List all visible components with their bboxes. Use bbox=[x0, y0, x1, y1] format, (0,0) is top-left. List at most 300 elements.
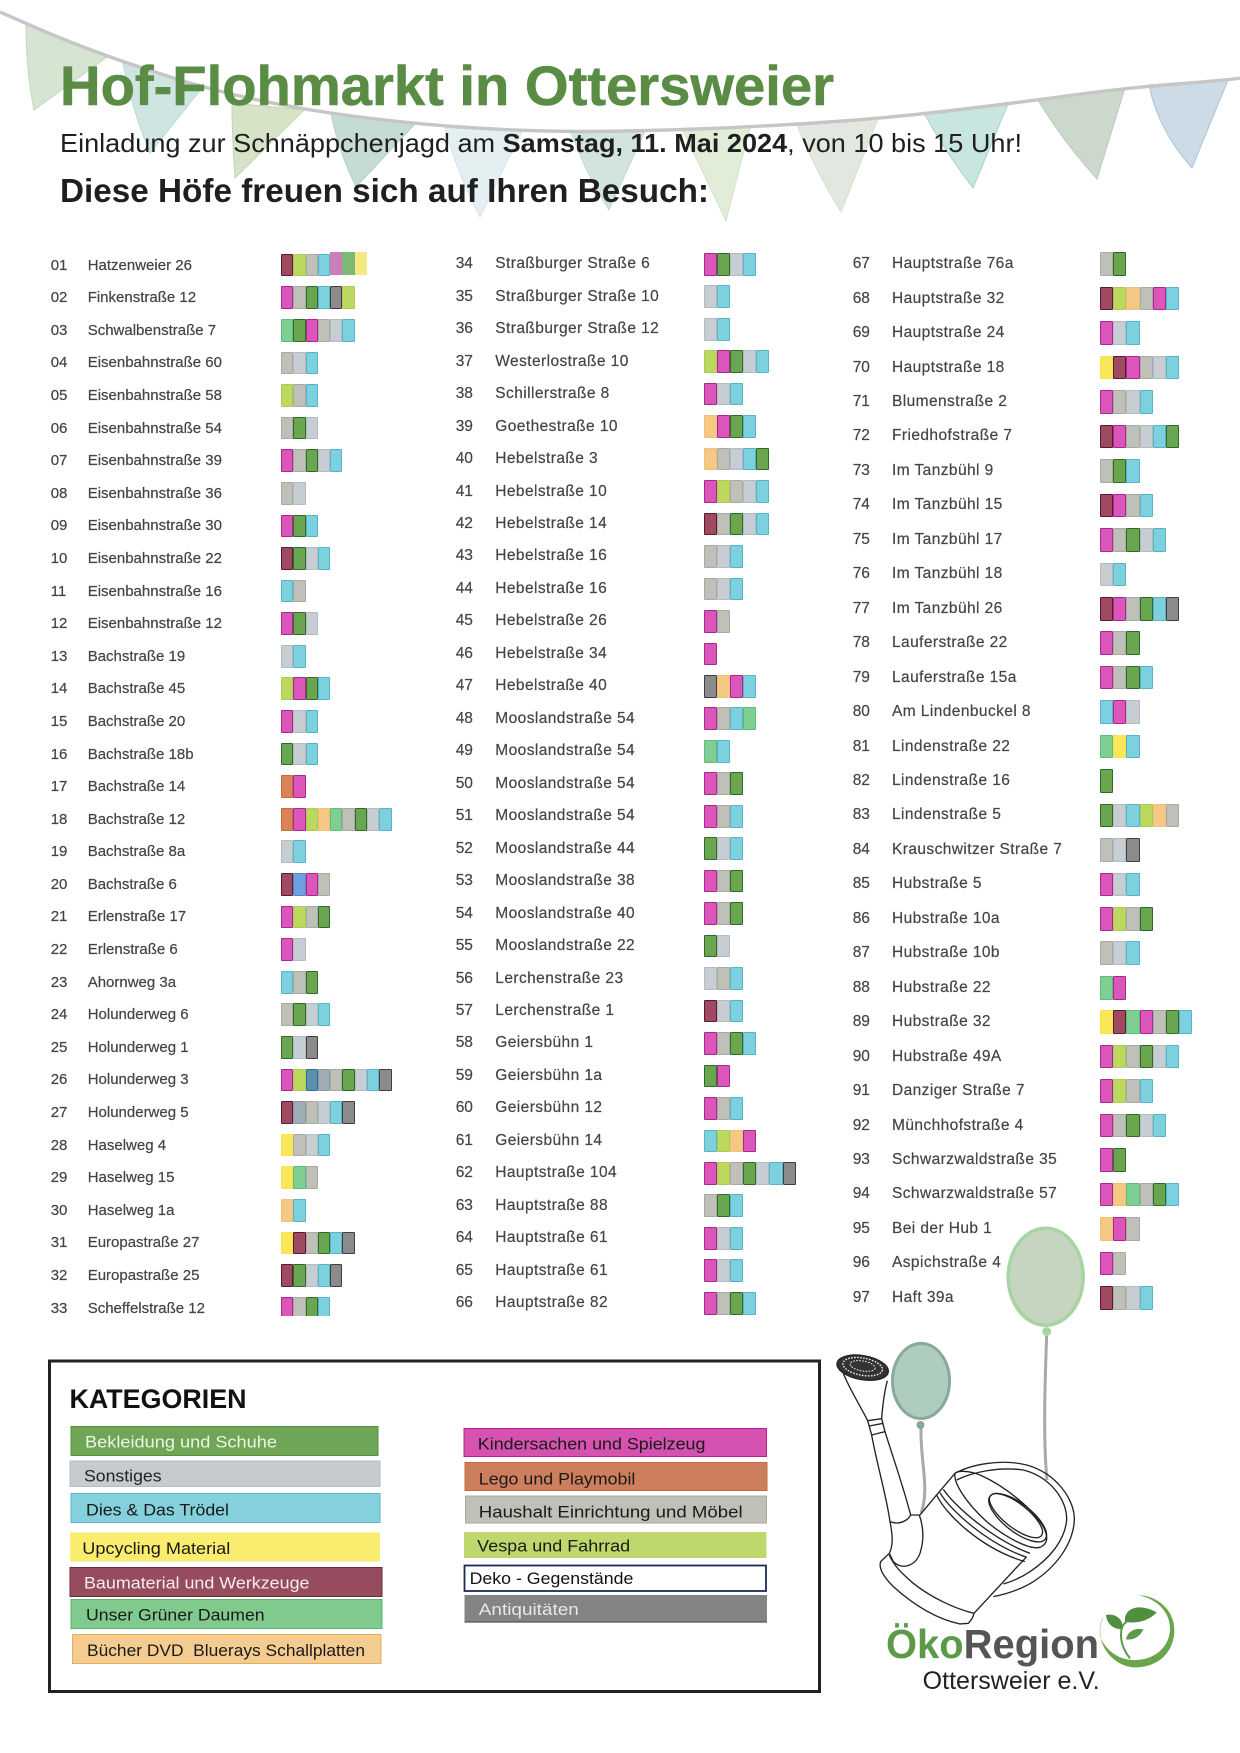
row 32 bbox=[51, 1264, 342, 1287]
row 03: 03 bbox=[51, 322, 67, 339]
bunting string bbox=[0, 12, 1240, 132]
category: decoration: Deko - Gegenstände bbox=[470, 1569, 633, 1588]
category: bric-a-brac: Dies & Das Trödel bbox=[86, 1501, 229, 1520]
logo subtitle: Ottersweier e.V. bbox=[923, 1668, 1100, 1695]
row 95: 95 bbox=[853, 1220, 870, 1237]
row 89 bbox=[853, 1005, 1192, 1039]
row 75: Im Tanzbühl 17 bbox=[892, 531, 1003, 548]
row 91: 91 bbox=[853, 1082, 870, 1099]
row 41 bbox=[456, 475, 796, 508]
row 15: 15 bbox=[51, 713, 67, 730]
row 70 bbox=[853, 350, 1192, 385]
category: books and media: Bücher DVD Bluerays Schallplatten bbox=[87, 1641, 365, 1660]
row 26 bbox=[51, 1069, 392, 1091]
row 78 bbox=[853, 626, 1192, 660]
row 06: 06 bbox=[51, 420, 67, 437]
row 88: Hubstraße 22 bbox=[892, 979, 991, 996]
row 83: Lindenstraße 5 bbox=[892, 806, 1001, 823]
panel: categories legend bbox=[50, 1361, 820, 1692]
category: antiques bbox=[464, 1595, 767, 1623]
row 41: Hebelstraße 10 bbox=[495, 483, 607, 500]
row 29: Haselweg 15 bbox=[88, 1169, 174, 1186]
row 45: Hebelstraße 26 bbox=[495, 612, 607, 629]
row 87 bbox=[853, 936, 1192, 971]
row 73: 73 bbox=[853, 462, 870, 479]
row 24: Holunderweg 6 bbox=[88, 1006, 189, 1023]
row 22: Erlenstraße 6 bbox=[88, 941, 178, 958]
row 11: Eisenbahnstraße 16 bbox=[88, 583, 222, 600]
row 22: 22 bbox=[51, 941, 67, 958]
row 69: 69 bbox=[853, 324, 870, 341]
category: vespa and bikes bbox=[464, 1532, 766, 1558]
row 33: Scheffelstraße 12 bbox=[88, 1300, 205, 1317]
category: green thumb: Unser Grüner Daumen bbox=[86, 1606, 265, 1625]
row 95 bbox=[853, 1212, 1192, 1246]
row 07: 07 bbox=[51, 452, 67, 469]
row 45 bbox=[456, 605, 796, 638]
row 60 bbox=[456, 1092, 796, 1125]
row 02 bbox=[51, 286, 355, 309]
row 36: Straßburger Straße 12 bbox=[495, 320, 659, 337]
category: building materials: Baumaterial und Werkzeuge bbox=[84, 1574, 310, 1593]
row 23: Ahornweg 3a bbox=[88, 974, 176, 991]
row 32: 32 bbox=[51, 1267, 67, 1284]
row 08: 08 bbox=[51, 485, 67, 502]
legend heading: KATEGORIEN bbox=[70, 1384, 246, 1414]
row 84: 84 bbox=[853, 841, 870, 858]
row 17 bbox=[51, 775, 306, 798]
row 01: 01 bbox=[51, 257, 67, 274]
row 51: Mooslandstraße 54 bbox=[495, 807, 635, 824]
category: children bbox=[464, 1428, 766, 1456]
row 59: Geiersbühn 1a bbox=[495, 1067, 602, 1084]
row 06 bbox=[51, 417, 318, 439]
row 68 bbox=[853, 281, 1192, 316]
row 23 bbox=[51, 971, 318, 994]
row 87: 87 bbox=[853, 944, 870, 961]
logo: ÖkoRegion Ottersweier bbox=[886, 1595, 1174, 1695]
row 20 bbox=[51, 873, 330, 896]
row 64: 64 bbox=[456, 1229, 473, 1246]
row 21: Erlenstraße 17 bbox=[88, 908, 186, 925]
row 29 bbox=[51, 1166, 318, 1189]
row 92: Münchhofstraße 4 bbox=[892, 1117, 1024, 1134]
row 55: 55 bbox=[456, 937, 473, 954]
row 11 bbox=[51, 580, 306, 602]
row 77: Im Tanzbühl 26 bbox=[892, 600, 1003, 617]
row 05: Eisenbahnstraße 58 bbox=[88, 387, 222, 404]
row 55 bbox=[456, 930, 796, 962]
row 14: Bachstraße 45 bbox=[88, 680, 185, 697]
logo wordmark: ÖkoRegion bbox=[886, 1621, 1099, 1667]
row 69 bbox=[853, 316, 1192, 350]
row 62: Hauptstraße 104 bbox=[495, 1164, 617, 1181]
row 44: 44 bbox=[456, 580, 473, 597]
icon: large balloon bbox=[1008, 1228, 1083, 1480]
row 68: 68 bbox=[853, 290, 870, 307]
row 21 bbox=[51, 906, 330, 928]
row 47 bbox=[456, 670, 796, 703]
row 90: Hubstraße 49A bbox=[892, 1048, 1002, 1065]
panel: address list column 3 bbox=[853, 247, 1192, 1315]
row 25: Holunderweg 1 bbox=[88, 1039, 189, 1056]
row 90: 90 bbox=[853, 1048, 870, 1065]
row 94: 94 bbox=[853, 1185, 870, 1202]
row 23: 23 bbox=[51, 974, 67, 991]
row 17: 17 bbox=[51, 778, 67, 795]
row 02: Finkenstraße 12 bbox=[88, 289, 196, 306]
row 85: Hubstraße 5 bbox=[892, 875, 982, 892]
row 03 bbox=[51, 319, 355, 342]
row 64 bbox=[456, 1222, 796, 1255]
row 24 bbox=[51, 1003, 330, 1026]
row 04: Eisenbahnstraße 60 bbox=[88, 354, 222, 371]
row 82: 82 bbox=[853, 772, 870, 789]
row 14 bbox=[51, 677, 330, 700]
row 66 bbox=[456, 1287, 796, 1319]
row 19: Bachstraße 8a bbox=[88, 843, 185, 860]
row 20: 20 bbox=[51, 876, 67, 893]
row 82: Lindenstraße 16 bbox=[892, 772, 1010, 789]
row 39: Goethestraße 10 bbox=[495, 418, 618, 435]
legend frame bbox=[50, 1361, 820, 1692]
row 52: Mooslandstraße 44 bbox=[495, 840, 635, 857]
row 16: 16 bbox=[51, 746, 67, 762]
row 50: Mooslandstraße 54 bbox=[495, 775, 635, 792]
row 65: 65 bbox=[456, 1262, 473, 1279]
row 24: 24 bbox=[51, 1006, 67, 1023]
row 82 bbox=[853, 764, 1192, 798]
row 87: Hubstraße 10b bbox=[892, 944, 1000, 961]
category: household: Haushalt Einrichtung und Möbel bbox=[479, 1502, 743, 1521]
row 27: 27 bbox=[51, 1104, 67, 1121]
row 76: Im Tanzbühl 18 bbox=[892, 565, 1003, 582]
row 93: 93 bbox=[853, 1151, 870, 1168]
row 61: Geiersbühn 14 bbox=[495, 1132, 602, 1149]
category: bric-a-brac bbox=[71, 1494, 380, 1522]
row 20: Bachstraße 6 bbox=[88, 876, 177, 893]
row 28: Haselweg 4 bbox=[88, 1137, 166, 1154]
row 71: 71 bbox=[853, 393, 870, 410]
row 37: 37 bbox=[456, 353, 473, 370]
row 74: 74 bbox=[853, 496, 870, 513]
category: children: Kindersachen und Spielzeug bbox=[478, 1434, 705, 1453]
row 62 bbox=[456, 1157, 796, 1190]
row 92: 92 bbox=[853, 1117, 870, 1134]
row 27 bbox=[51, 1101, 355, 1124]
row 07 bbox=[51, 449, 342, 472]
row 40: 40 bbox=[456, 450, 473, 467]
row 58: 58 bbox=[456, 1034, 473, 1051]
row 70: 70 bbox=[853, 359, 870, 376]
icon: watering can bbox=[835, 1351, 1074, 1624]
row 54 bbox=[456, 897, 796, 930]
row 50 bbox=[456, 768, 796, 800]
row 11: 11 bbox=[51, 583, 66, 600]
panel: address list column 2 bbox=[456, 253, 796, 1315]
row 40 bbox=[456, 443, 796, 475]
row 18: 18 bbox=[51, 811, 67, 828]
row 92 bbox=[853, 1108, 1192, 1143]
row 38: Schillerstraße 8 bbox=[495, 385, 610, 402]
category: vespa and bikes: Vespa und Fahrrad bbox=[477, 1537, 630, 1556]
row 61 bbox=[456, 1125, 796, 1157]
row 49: 49 bbox=[456, 742, 473, 759]
row 01: Hatzenweier 26 bbox=[88, 257, 192, 274]
row 25: 25 bbox=[51, 1039, 67, 1056]
row 51 bbox=[456, 800, 796, 832]
row 03: Schwalbenstraße 7 bbox=[88, 322, 216, 339]
row 69: Hauptstraße 24 bbox=[892, 324, 1005, 341]
row 06: Eisenbahnstraße 54 bbox=[88, 420, 222, 437]
row 49 bbox=[456, 735, 796, 768]
title: Hof-Flohmarkt in Ottersweier bbox=[60, 54, 834, 117]
row 26: 26 bbox=[51, 1071, 67, 1088]
row 75 bbox=[853, 523, 1192, 557]
row 95: Bei der Hub 1 bbox=[892, 1220, 992, 1237]
row 79: Lauferstraße 15a bbox=[892, 669, 1017, 686]
row 71 bbox=[853, 385, 1192, 419]
row 09: Eisenbahnstraße 30 bbox=[88, 517, 222, 534]
row 67: Hauptstraße 76a bbox=[892, 255, 1014, 272]
row 66: 66 bbox=[456, 1294, 473, 1311]
row 58: Geiersbühn 1 bbox=[495, 1034, 593, 1051]
row 15: Bachstraße 20 bbox=[88, 713, 185, 730]
row 46: 46 bbox=[456, 645, 473, 662]
row 88 bbox=[853, 971, 1192, 1005]
row 05: 05 bbox=[51, 387, 67, 404]
category: lego: Lego und Playmobil bbox=[479, 1469, 635, 1488]
row 93 bbox=[853, 1143, 1192, 1177]
icon: sprout in circle bbox=[1100, 1595, 1174, 1667]
panel: address list column 1 bbox=[51, 252, 392, 1317]
row 54: 54 bbox=[456, 905, 473, 922]
row 43 bbox=[456, 540, 796, 573]
row 56: 56 bbox=[456, 970, 473, 987]
row 45: 45 bbox=[456, 612, 473, 629]
row 88: 88 bbox=[853, 979, 870, 996]
row 13 bbox=[51, 645, 306, 668]
row 14: 14 bbox=[51, 680, 67, 697]
row 52: 52 bbox=[456, 840, 473, 857]
row 15 bbox=[51, 710, 318, 733]
row 59: 59 bbox=[456, 1067, 473, 1084]
row 76 bbox=[853, 557, 1192, 592]
row 53: 53 bbox=[456, 872, 473, 889]
row 77 bbox=[853, 592, 1192, 626]
row 09: 09 bbox=[51, 517, 67, 534]
row 51: 51 bbox=[456, 807, 473, 824]
row 79: 79 bbox=[853, 669, 870, 686]
row 31: 31 bbox=[51, 1234, 67, 1251]
row 25 bbox=[51, 1036, 318, 1059]
row 53 bbox=[456, 865, 796, 897]
invitation line: Einladung zur Schnäppchenjagd am Samstag, 11. Mai 2024 , von 10 bis 15 Uhr! bbox=[60, 128, 1022, 158]
row 50: 50 bbox=[456, 775, 473, 792]
row 31 bbox=[51, 1232, 355, 1254]
row 76: 76 bbox=[853, 565, 870, 582]
row 89: 89 bbox=[853, 1013, 870, 1030]
row 66: Hauptstraße 82 bbox=[495, 1294, 608, 1311]
category: clothing bbox=[71, 1426, 378, 1456]
category: upcycling bbox=[70, 1532, 380, 1562]
row 21: 21 bbox=[51, 908, 67, 925]
row 17: Bachstraße 14 bbox=[88, 778, 185, 795]
row 38 bbox=[456, 383, 743, 405]
row 43: Hebelstraße 16 bbox=[495, 547, 607, 564]
row 49: Mooslandstraße 54 bbox=[495, 742, 635, 759]
row 37 bbox=[456, 350, 769, 373]
category: upcycling: Upcycling Material bbox=[82, 1539, 230, 1558]
row 35: Straßburger Straße 10 bbox=[495, 288, 659, 305]
row 72: Friedhofstraße 7 bbox=[892, 427, 1012, 444]
row 43: 43 bbox=[456, 547, 473, 564]
row 80 bbox=[853, 695, 1192, 729]
row 29: 29 bbox=[51, 1169, 67, 1186]
row 55: Mooslandstraße 22 bbox=[495, 937, 635, 954]
row 39 bbox=[456, 410, 796, 443]
row 08: Eisenbahnstraße 36 bbox=[88, 485, 222, 502]
row 13: 13 bbox=[51, 648, 67, 665]
row 36: 36 bbox=[456, 320, 473, 337]
row 57: 57 bbox=[456, 1002, 473, 1019]
row 91: Danziger Straße 7 bbox=[892, 1082, 1025, 1099]
row 81: Lindenstraße 22 bbox=[892, 738, 1010, 755]
row 60: Geiersbühn 12 bbox=[495, 1099, 602, 1116]
row 47: 47 bbox=[456, 677, 473, 694]
row 10: Eisenbahnstraße 22 bbox=[88, 550, 222, 567]
row 19 bbox=[51, 840, 306, 863]
row 08 bbox=[51, 482, 306, 505]
row 41: 41 bbox=[456, 483, 473, 500]
row 73 bbox=[853, 454, 1192, 488]
row 91 bbox=[853, 1074, 1192, 1108]
row 81: 81 bbox=[853, 738, 870, 755]
row 16 bbox=[51, 743, 318, 765]
row 63 bbox=[456, 1190, 796, 1222]
row 60: 60 bbox=[456, 1099, 473, 1116]
row 94 bbox=[853, 1177, 1192, 1212]
row 04: 04 bbox=[51, 354, 67, 371]
row 32: Europastraße 25 bbox=[88, 1267, 199, 1284]
row 63: Hauptstraße 88 bbox=[495, 1197, 608, 1214]
row 67 bbox=[853, 247, 1192, 281]
row 96: Aspichstraße 4 bbox=[892, 1254, 1001, 1271]
row 38: 38 bbox=[456, 385, 473, 402]
row 48 bbox=[456, 703, 796, 735]
row 48: 48 bbox=[456, 710, 473, 727]
category: building materials bbox=[70, 1568, 382, 1596]
row 94: Schwarzwaldstraße 57 bbox=[892, 1185, 1057, 1202]
row 71: Blumenstraße 2 bbox=[892, 393, 1007, 410]
row 57: Lerchenstraße 1 bbox=[495, 1002, 614, 1019]
row 44: Hebelstraße 16 bbox=[495, 580, 607, 597]
row 27: Holunderweg 5 bbox=[88, 1104, 189, 1121]
row 12 bbox=[51, 612, 318, 635]
row 22 bbox=[51, 938, 306, 961]
row 33 bbox=[51, 1297, 330, 1317]
row 75: 75 bbox=[853, 531, 870, 548]
row 56 bbox=[456, 962, 796, 995]
category: misc: Sonstiges bbox=[84, 1467, 162, 1486]
row 44 bbox=[456, 573, 796, 605]
row 54: Mooslandstraße 40 bbox=[495, 905, 635, 922]
row 42 bbox=[456, 508, 796, 540]
row 56: Lerchenstraße 23 bbox=[495, 970, 624, 987]
category: clothing: Bekleidung und Schuhe bbox=[85, 1433, 277, 1452]
row 86: 86 bbox=[853, 910, 870, 927]
row 68: Hauptstraße 32 bbox=[892, 290, 1005, 307]
row 85: 85 bbox=[853, 875, 870, 892]
row 18: Bachstraße 12 bbox=[88, 811, 185, 828]
row 80: 80 bbox=[853, 703, 870, 720]
category: green thumb bbox=[71, 1600, 382, 1628]
row 74: Im Tanzbühl 15 bbox=[892, 496, 1003, 513]
row 30 bbox=[51, 1199, 306, 1222]
row 96: 96 bbox=[853, 1254, 870, 1271]
row 10: 10 bbox=[51, 550, 67, 567]
row 02: 02 bbox=[51, 289, 67, 306]
row 86 bbox=[853, 902, 1192, 936]
row 04 bbox=[51, 352, 318, 374]
row 35: 35 bbox=[456, 288, 473, 305]
category: misc bbox=[70, 1461, 380, 1486]
row 97: 97 bbox=[853, 1289, 870, 1306]
row 46: Hebelstraße 34 bbox=[495, 645, 607, 662]
row 30: Haselweg 1a bbox=[88, 1202, 174, 1219]
row 40: Hebelstraße 3 bbox=[495, 450, 598, 467]
category: antiques: Antiquitäten bbox=[479, 1600, 579, 1619]
row 78: 78 bbox=[853, 634, 870, 651]
row 85 bbox=[853, 867, 1192, 902]
subheading: Diese Höfe freuen sich auf Ihren Besuch: bbox=[60, 172, 709, 209]
row 72: 72 bbox=[853, 427, 870, 444]
row 31: Europastraße 27 bbox=[88, 1234, 199, 1251]
row 05 bbox=[51, 384, 318, 407]
row 07: Eisenbahnstraße 39 bbox=[88, 452, 222, 469]
category: books and media bbox=[72, 1634, 381, 1664]
row 70: Hauptstraße 18 bbox=[892, 359, 1005, 376]
row 83: 83 bbox=[853, 806, 870, 823]
row 90 bbox=[853, 1039, 1192, 1074]
row 42: 42 bbox=[456, 515, 473, 532]
row 42: Hebelstraße 14 bbox=[495, 515, 607, 532]
category: household bbox=[466, 1496, 766, 1523]
row 84: Krauschwitzer Straße 7 bbox=[892, 841, 1062, 858]
row 37: Westerlostraße 10 bbox=[495, 353, 629, 370]
row 97 bbox=[853, 1281, 1192, 1315]
row 86: Hubstraße 10a bbox=[892, 910, 1000, 927]
row 77: 77 bbox=[853, 600, 870, 617]
row 01 bbox=[51, 252, 367, 276]
row 97: Haft 39a bbox=[892, 1289, 954, 1306]
row 34 bbox=[456, 253, 756, 276]
row 79 bbox=[853, 660, 1192, 695]
row 33: 33 bbox=[51, 1300, 67, 1317]
row 26: Holunderweg 3 bbox=[88, 1071, 189, 1088]
row 67: 67 bbox=[853, 255, 870, 272]
row 34: 34 bbox=[456, 255, 473, 272]
row 28 bbox=[51, 1134, 330, 1156]
row 48: Mooslandstraße 54 bbox=[495, 710, 635, 727]
row 73: Im Tanzbühl 9 bbox=[892, 462, 994, 479]
row 13: Bachstraße 19 bbox=[88, 648, 185, 665]
row 35 bbox=[456, 285, 730, 308]
row 19: 19 bbox=[51, 843, 67, 860]
row 58 bbox=[456, 1027, 796, 1060]
row 65: Hauptstraße 61 bbox=[495, 1262, 608, 1279]
row 61: 61 bbox=[456, 1132, 473, 1149]
